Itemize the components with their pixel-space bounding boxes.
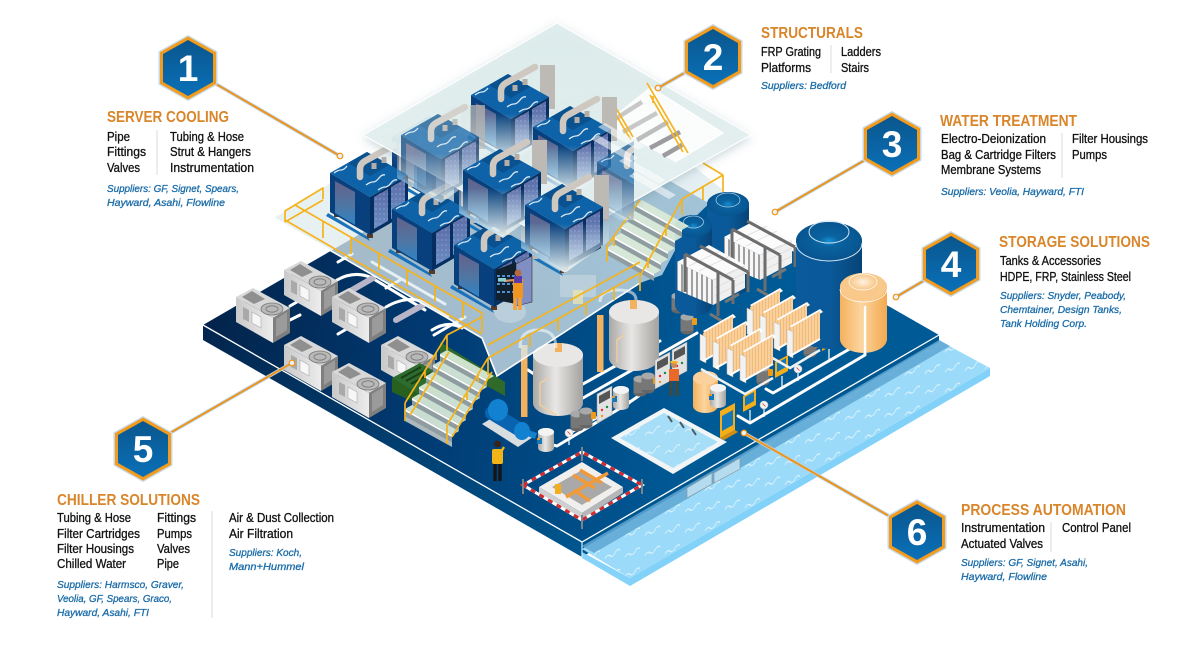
items: Pumps <box>1072 148 1107 162</box>
first level glass platform <box>274 90 723 376</box>
items: Tanks & Accessories <box>1000 254 1101 268</box>
blue pump <box>482 399 536 447</box>
callout 3: water treatment <box>772 111 1148 215</box>
items: Pipe <box>107 130 130 144</box>
stair treads in opening <box>609 102 682 156</box>
badge 5 <box>114 416 172 482</box>
settling basin <box>611 408 727 474</box>
items: Ladders <box>841 45 881 59</box>
badge 4: 4 <box>941 244 962 285</box>
chillers <box>236 261 435 418</box>
badge 6 <box>888 499 946 565</box>
heading: CHILLER SOLUTIONS <box>57 492 200 509</box>
items: Instrumentation <box>170 161 254 175</box>
items: HDPE, FRP, Stainless Steel <box>1000 270 1131 284</box>
items <box>107 130 254 175</box>
items: Filter Housings <box>57 542 134 556</box>
items: Platforms <box>761 61 811 75</box>
badge 1: 1 <box>178 48 198 89</box>
small orange tank <box>693 371 718 413</box>
suppliers: Suppliers: Veolia, Hayward, FTI <box>941 186 1084 198</box>
technician at open server <box>496 256 532 310</box>
orange pit pipework <box>566 470 608 501</box>
items: Pipe <box>157 557 179 571</box>
yellow control kiosk <box>720 403 738 440</box>
faded worker under platform <box>573 290 583 304</box>
badge 3: 3 <box>882 124 902 165</box>
suppliers: Suppliers: Bedford <box>761 80 847 92</box>
items: Fittings <box>157 511 196 525</box>
suppliers: Chemtainer, Design Tanks, <box>1000 304 1122 316</box>
items: Tubing & Hose <box>57 511 131 525</box>
items: Strut & Hangers <box>170 145 251 159</box>
suppliers: Suppliers: Snyder, Peabody, <box>1000 290 1126 302</box>
suppliers: Veolia, GF, Spears, Graco, <box>57 593 172 605</box>
floor pipework <box>528 307 865 446</box>
worker in orange vest <box>669 361 679 396</box>
stairs from first level to second level <box>607 163 723 291</box>
items: Bag & Cartridge Filters <box>941 148 1056 162</box>
badge 3 <box>862 111 922 177</box>
lower server row <box>326 107 607 313</box>
leader 3 <box>772 160 865 215</box>
badge 6: 6 <box>907 512 927 553</box>
suppliers: Hayward, Asahi, Flowline <box>107 197 225 209</box>
items: Electro-Deionization <box>941 132 1046 146</box>
items: Filter Cartridges <box>57 527 140 541</box>
fenced equipment pit <box>523 447 642 529</box>
badge 4 <box>922 231 980 297</box>
suppliers <box>961 557 1088 583</box>
badge 2: 2 <box>703 37 723 78</box>
heading: WATER TREATMENT <box>940 113 1077 130</box>
suppliers <box>107 183 239 209</box>
items: Chilled Water <box>57 557 126 571</box>
badge 2 <box>684 24 742 90</box>
large storage tanks <box>700 221 887 394</box>
callout 1: server cooling <box>107 35 343 209</box>
outfall boxes <box>687 458 740 498</box>
items: Fittings <box>107 145 146 159</box>
badge 1 <box>158 35 218 101</box>
water reservoir along the platform edge <box>582 340 990 586</box>
items: Actuated Valves <box>961 537 1043 551</box>
woman inspector <box>492 441 504 481</box>
suppliers: Suppliers: Harmsco, Graver, <box>57 579 184 591</box>
items: Filter Housings <box>1072 132 1148 146</box>
items <box>961 521 1131 552</box>
suppliers: Suppliers: GF, Signet, Spears, <box>107 183 239 195</box>
platform base <box>203 118 939 557</box>
heading: SERVER COOLING <box>107 109 229 126</box>
suppliers: Suppliers: Koch, <box>229 547 302 559</box>
suppliers: Suppliers: GF, Signet, Asahi, <box>961 557 1088 569</box>
upper server row <box>397 64 634 273</box>
items: Valves <box>157 542 190 556</box>
suppliers: Hayward, Flowline <box>961 571 1047 583</box>
suppliers: Mann+Hummel <box>229 561 305 573</box>
leader 4 <box>893 280 925 300</box>
callout 2: structurals <box>655 24 881 92</box>
items: Control Panel <box>1062 521 1131 535</box>
items: Pumps <box>157 527 192 541</box>
items <box>1000 254 1131 284</box>
leader 5 <box>170 360 295 433</box>
items: Instrumentation <box>961 521 1045 535</box>
items <box>57 511 334 618</box>
leader 2 <box>655 72 686 91</box>
orange storage tank <box>840 273 887 353</box>
callout 5: chiller solutions <box>57 360 334 619</box>
blue storage tank <box>796 221 862 349</box>
items: Membrane Systems <box>941 163 1041 177</box>
orange filter slabs <box>700 288 823 394</box>
gray process tanks <box>533 300 659 416</box>
suppliers: Tank Holding Corp. <box>1000 318 1087 330</box>
items: Tubing & Hose <box>170 130 244 144</box>
heading: STRUCTURALS <box>761 25 863 42</box>
items: Stairs <box>841 61 869 75</box>
first level guard rail front <box>285 188 640 358</box>
badge 5: 5 <box>133 429 153 470</box>
items: FRP Grating <box>761 45 821 59</box>
leader 1 <box>216 84 343 159</box>
second level glass platform with stair opening <box>363 23 751 244</box>
items: Valves <box>107 161 140 175</box>
chiller piping <box>290 254 465 352</box>
support columns <box>521 315 604 417</box>
suppliers <box>1000 290 1126 330</box>
heading: PROCESS AUTOMATION <box>961 502 1126 519</box>
membrane racks <box>677 220 795 324</box>
leader 6 <box>741 430 889 516</box>
suppliers <box>57 547 305 619</box>
process skid: pumps, panels, small tanks <box>537 292 835 452</box>
items <box>941 132 1148 178</box>
suppliers: Hayward, Asahi, FTI <box>57 607 149 619</box>
stairs from ground to first level <box>405 317 494 447</box>
water treatment tanks <box>675 192 749 316</box>
ghost stair under second level glass <box>591 123 676 199</box>
heading: STORAGE SOLUTIONS <box>999 234 1150 251</box>
green generator <box>392 342 505 404</box>
callout 6: process automation <box>741 430 1131 583</box>
items: Air & Dust Collection <box>229 511 334 525</box>
items <box>761 45 881 75</box>
callout 4: storage solutions <box>893 231 1150 330</box>
items: Air Filtration <box>229 527 293 541</box>
